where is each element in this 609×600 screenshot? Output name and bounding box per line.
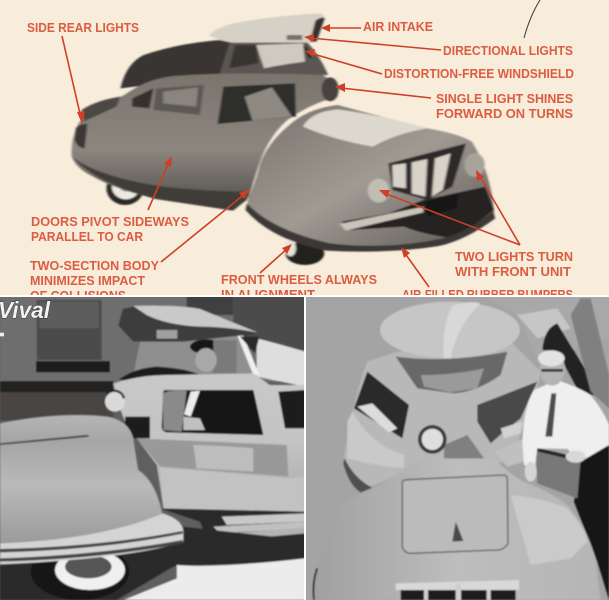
label: two-section line 2: MINIMIZES IMPACT (30, 273, 145, 288)
illustration: car with separate front unit (70, 13, 497, 266)
label: side rear lights: SIDE REAR LIGHTS (27, 20, 139, 35)
decorative pen stroke top right (524, 0, 540, 38)
label: two lights line 1: TWO LIGHTS TURN (455, 249, 573, 264)
label: doors line 2: PARALLEL TO CAR (31, 229, 144, 244)
label: front wheels line 2: IN ALIGNMENT (221, 287, 315, 302)
label: two-section line 1: TWO-SECTION BODY (30, 258, 159, 273)
label: single light line 2: FORWARD ON TURNS (436, 106, 573, 121)
label: air intake: AIR INTAKE (363, 19, 433, 34)
label: front wheels line 1: FRONT WHEELS ALWAYS (221, 272, 377, 287)
panel: side photo of man driving the car (0, 297, 304, 600)
label: doors line 1: DOORS PIVOT SIDEWAYS (31, 214, 189, 229)
callout labels (27, 19, 574, 303)
label: two lights line 2: WITH FRONT UNIT (455, 264, 571, 279)
decorative dash (0, 333, 4, 336)
label: two-section line 3: OF COLLISIONS (30, 288, 126, 303)
panel: overhead photo of inventor beside the car (306, 297, 609, 600)
panel: annotated cutaway illustration of the car (0, 0, 609, 303)
arrows: callout leader lines (62, 24, 520, 287)
